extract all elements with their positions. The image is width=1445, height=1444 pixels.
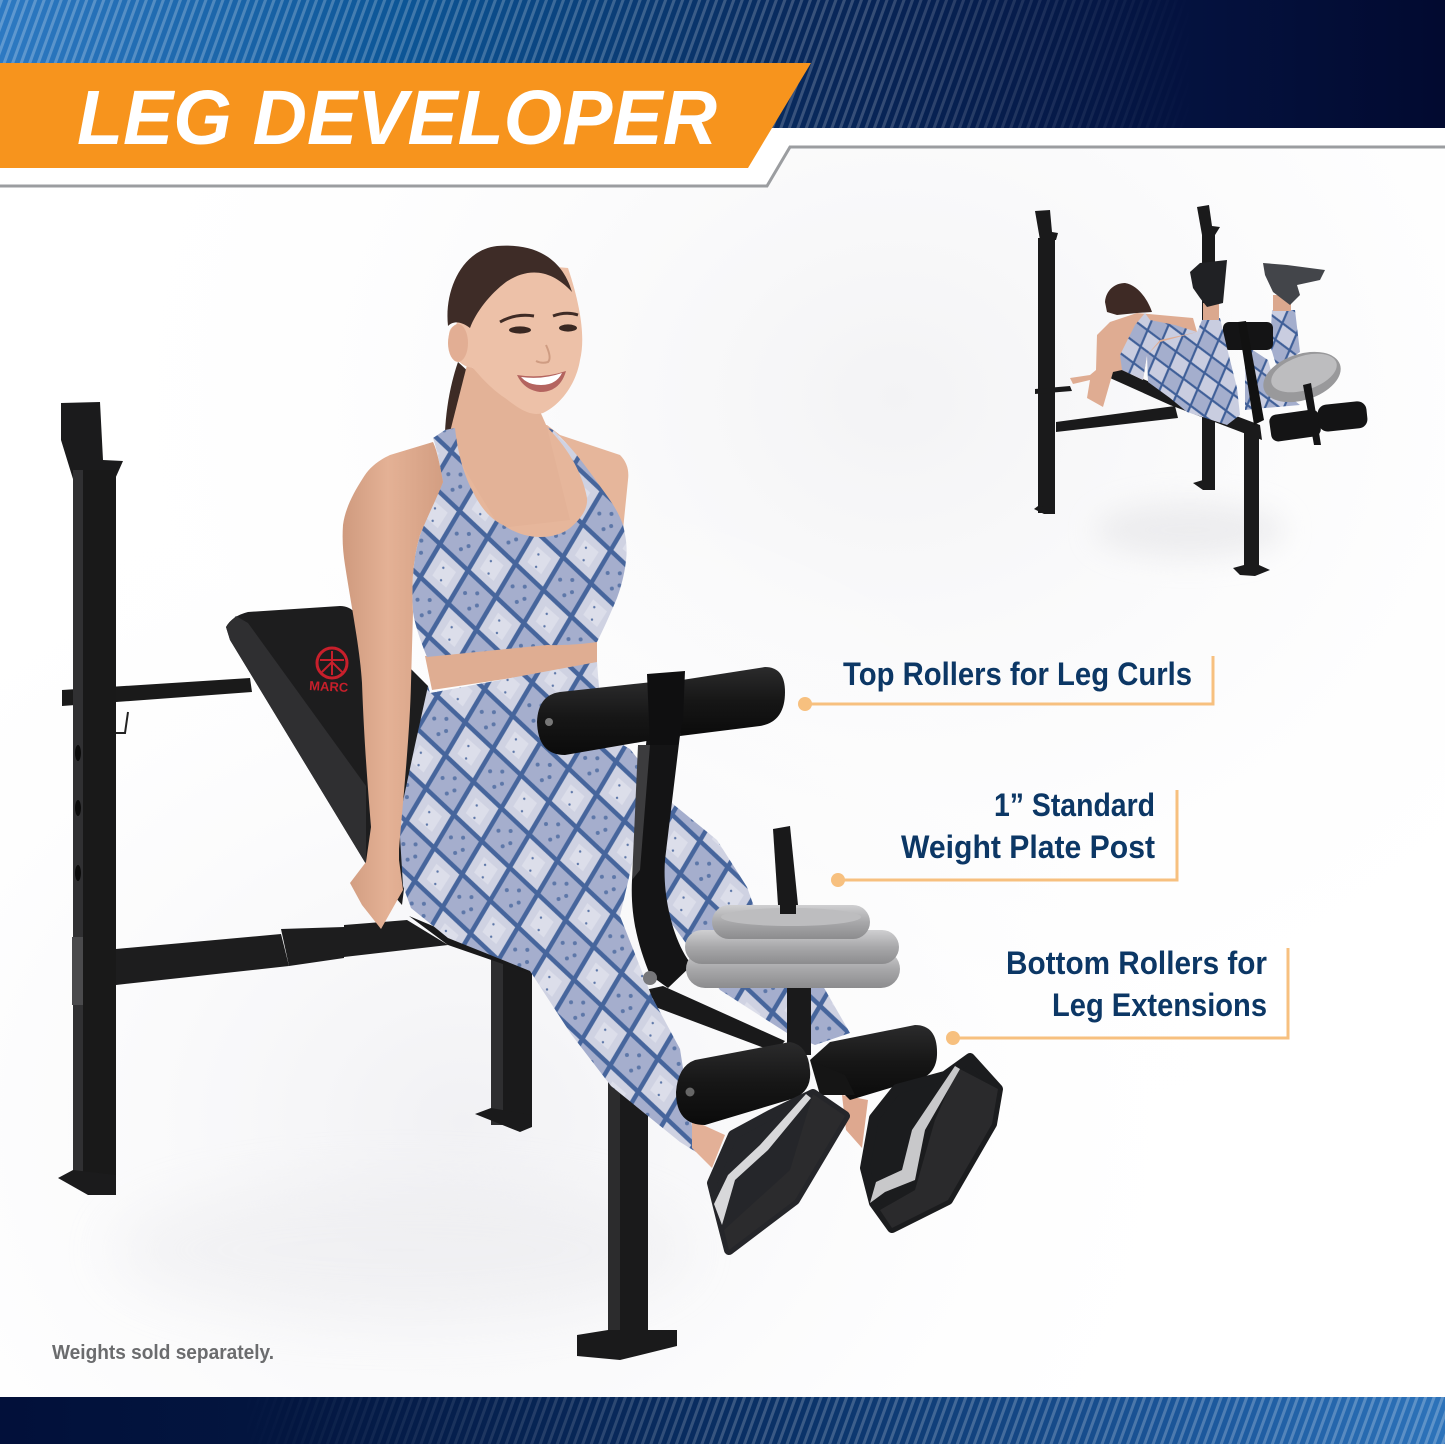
facial features [500,313,578,392]
small top [1120,313,1197,380]
midriff [425,640,597,690]
callout: top rollers [798,656,1213,711]
front leg [577,1080,677,1360]
floor shadow: small bench [1095,502,1285,558]
small bottom rollers [1268,400,1368,442]
back and arm [1070,313,1197,407]
sports top [412,427,627,657]
small photo: woman doing leg curls [1034,205,1368,576]
right shoe [865,1058,998,1228]
small top roller [1223,322,1273,350]
small frame [1034,205,1270,576]
header band [0,0,1445,128]
backrest pad [226,606,428,905]
leg developer arm [632,735,692,988]
title banner: LEG DEVELOPER [77,75,717,161]
face [449,262,582,414]
hair ponytail [445,362,472,432]
small ankles [1203,295,1291,320]
plate stack [685,905,900,988]
near arm [343,442,443,929]
callout: weight plate post: 1” Standard [994,787,1155,823]
callout: top rollers: Top Rollers for Leg Curls [843,656,1192,692]
floor shadow: main bench [110,1180,690,1320]
neck [450,365,570,528]
callout: bottom rollers [946,945,1288,1045]
near ankle [692,1120,725,1168]
right roller [680,667,785,736]
far leg [597,730,850,1045]
hair [447,246,572,328]
left roller [537,681,664,755]
callout: bottom rollers: Bottom Rollers for [1006,945,1267,981]
bracket [647,671,685,745]
far thigh [1245,345,1300,410]
hip and near leg [399,662,696,1152]
footnote: Weights sold separately. [52,1342,274,1364]
bench rear leg [475,960,532,1132]
bench spine [409,916,785,1052]
grey outline rule [0,147,1445,186]
callout: weight plate post: Weight Plate Post [901,829,1155,865]
hair [1105,283,1152,315]
small legs [1147,318,1240,425]
small plate [1257,343,1347,445]
upper bar [62,678,252,733]
callout: weight plate post [831,787,1177,887]
footer band [0,1397,1445,1444]
far ankle [842,1095,868,1148]
left shoe [712,1094,845,1250]
title banner [0,63,811,168]
small shoes [1190,260,1325,307]
rear upright [58,402,123,1195]
backrest pad: MARC [309,678,349,695]
callout: bottom rollers: Leg Extensions [1052,987,1267,1023]
small strap arm [1238,321,1264,425]
lower bar [116,920,448,985]
bottom rollers [676,1025,937,1125]
weight post and plates [685,826,900,1055]
main bench frame [58,402,785,1360]
woman seated [343,246,868,1168]
raised far leg [1270,310,1300,368]
top rollers [537,667,785,988]
torso skin [414,425,628,610]
ear [448,324,468,362]
